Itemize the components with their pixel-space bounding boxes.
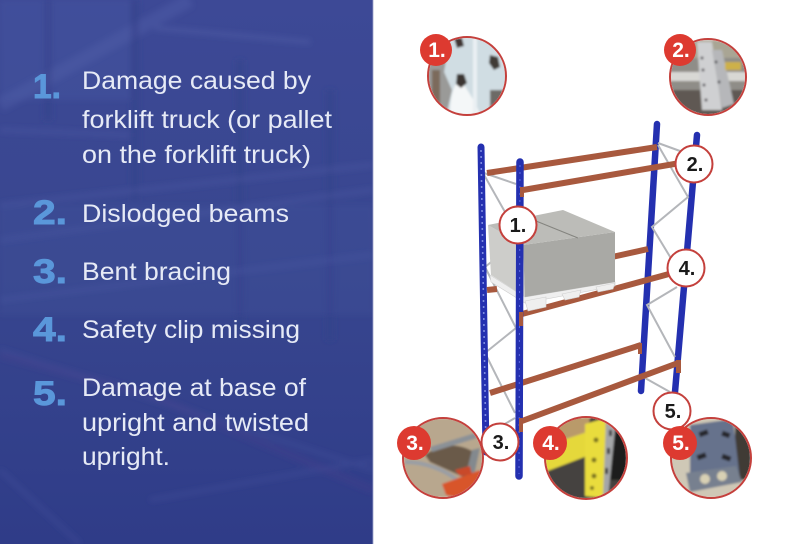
badge 3: 3. — [406, 432, 424, 455]
badge 3 — [397, 426, 431, 460]
list item 5 — [33, 374, 309, 471]
marker 4 — [668, 250, 704, 286]
marker 3 — [482, 424, 518, 460]
panel: blue list background — [0, 0, 374, 544]
list item 2: 2. — [33, 194, 67, 232]
list item 5: upright and twisted — [82, 409, 309, 437]
bracing — [483, 143, 688, 425]
list item 5: Damage at base of — [82, 374, 306, 402]
list item 1: on the forklift truck) — [82, 141, 311, 169]
list item 4 — [33, 311, 300, 349]
list item 1 — [33, 67, 332, 169]
badge 4: 4. — [542, 432, 560, 455]
beams — [487, 147, 680, 421]
badge 2: 2. — [672, 39, 690, 62]
list item 4: 4. — [33, 311, 67, 349]
front upright — [519, 162, 520, 476]
pallet rack diagram — [481, 124, 697, 476]
marker 1: 1. — [510, 215, 526, 237]
badge 1 — [420, 34, 452, 66]
marker 3: 3. — [493, 432, 509, 454]
photo 3: bent bracing — [403, 418, 483, 498]
marker 2 — [676, 146, 712, 182]
list item 3: Bent bracing — [82, 258, 231, 286]
marker 4: 4. — [679, 258, 695, 280]
list item 5: 5. — [33, 375, 67, 413]
pallet — [490, 275, 615, 311]
badge 1: 1. — [428, 39, 446, 62]
list item 2: Dislodged beams — [82, 200, 289, 228]
marker 5 — [654, 392, 690, 430]
list item 2 — [33, 194, 289, 232]
list item 1: forklift truck (or pallet — [82, 106, 332, 134]
list item 4: Safety clip missing — [82, 316, 300, 344]
photo 5: damaged base of upright — [671, 418, 751, 498]
photo 4: missing safety clip — [545, 417, 627, 499]
list item 1: Damage caused by — [82, 67, 312, 95]
badge 4 — [533, 426, 567, 460]
marker 5: 5. — [665, 401, 681, 423]
marker 2: 2. — [687, 154, 703, 176]
rear right uprights — [641, 124, 697, 392]
left upright — [481, 147, 486, 452]
beam end connectors — [519, 187, 681, 432]
list item 1: 1. — [33, 68, 61, 106]
marker 1 — [500, 206, 536, 244]
list item 3 — [33, 253, 231, 291]
badge 5 — [663, 426, 697, 460]
photo 2: dislodged beam — [670, 39, 746, 116]
badge 5: 5. — [672, 432, 690, 455]
badge 2 — [664, 34, 696, 66]
list item 5: upright. — [82, 443, 170, 471]
list item 3: 3. — [33, 253, 67, 291]
box — [488, 210, 615, 297]
photo 1: damaged upright — [428, 37, 508, 117]
